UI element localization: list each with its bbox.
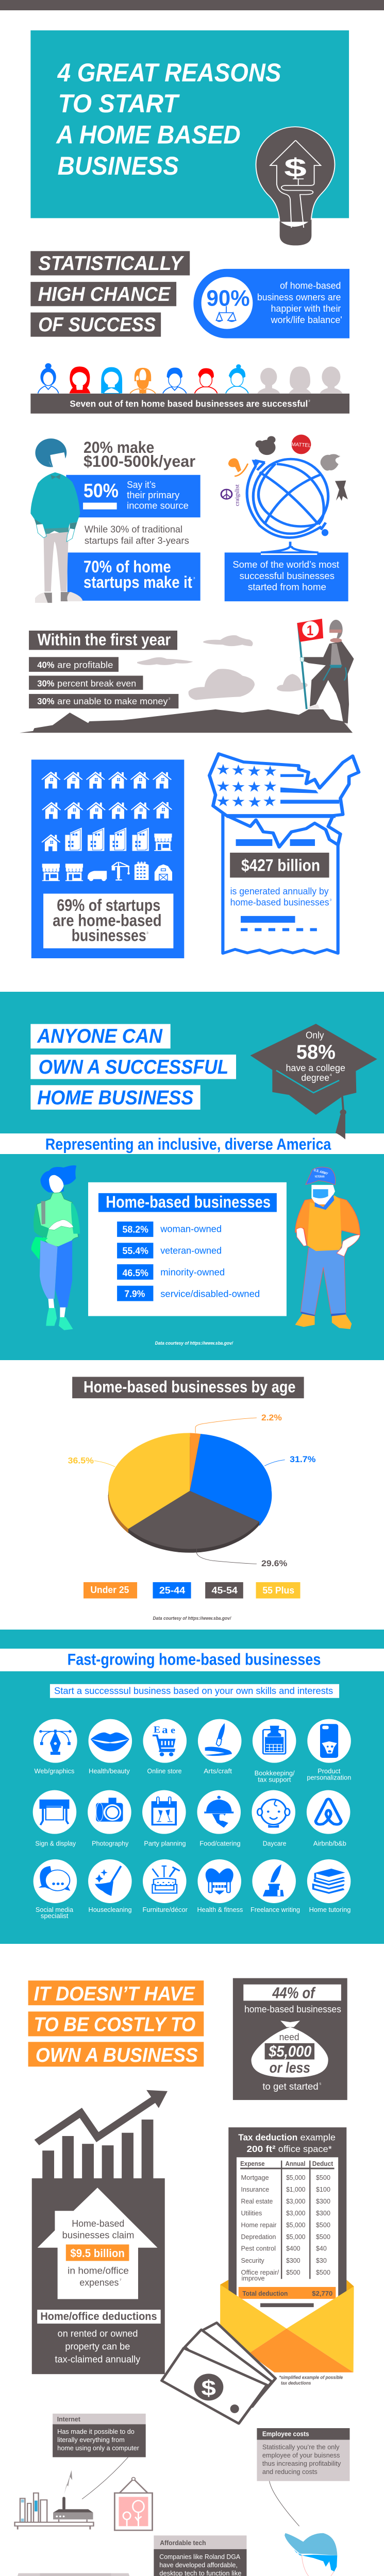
- table: tax deduction example: example: [300, 2132, 336, 2142]
- panel: home office deductions: in home/office: [68, 2266, 129, 2276]
- panel: 44 percent need 5000 or less: 5: [320, 2082, 322, 2086]
- illustration: globe with company logos: MATTEL: [291, 442, 311, 449]
- labels: business types: Home tutoring: [309, 1906, 350, 1913]
- legend: Under 25: [90, 1585, 129, 1596]
- subheading: start a successful business: [50, 1684, 339, 1698]
- panel: 69 percent home based: ★★★: [136, 860, 147, 865]
- panel: income statistics: income source: [127, 501, 189, 511]
- table: tax deduction example: Utilities: [241, 2209, 262, 2217]
- panel: income statistics: 20% make: [84, 439, 154, 456]
- callout: employee costs: employee of your buisness: [262, 2452, 340, 2459]
- section: hero and statistics heading: [30, 30, 349, 338]
- callout: graduation cap 58 percent: have a college: [286, 1063, 345, 1074]
- callout: 90 percent happier: work/life balance': [271, 315, 342, 326]
- panel: home-based businesses stats: 58.2%: [123, 1225, 148, 1235]
- illustration: receipt with american flag map: $427 billion: [241, 856, 320, 875]
- labels: business types: tax support: [258, 1775, 291, 1783]
- panel: home office deductions: Home/office deductions: [40, 2310, 157, 2323]
- callout: graduation cap 58 percent: [251, 1024, 377, 1139]
- illustration: shelf with books and router: [15, 2470, 93, 2530]
- table: tax deduction example: Real estate: [241, 2197, 273, 2205]
- illustration: receipt with american flag map: is generated annually by: [230, 887, 329, 897]
- callout: affordable tech: Companies like Roland DGA: [159, 2553, 240, 2561]
- heading: anyone can own a successful home business: [30, 1024, 236, 1110]
- stat: thirty percent unable to make money: 30%: [37, 696, 55, 706]
- icon: web graphics: [34, 1719, 77, 1763]
- heading: anyone can own a successful home business: HOME BUSINESS: [37, 1087, 194, 1109]
- table: tax deduction example: Depredation: [241, 2233, 276, 2241]
- illustration: woman with bag: [31, 1165, 80, 1330]
- heading: anyone can own a successful home business: ANYONE CAN: [37, 1025, 163, 1047]
- panel: hero teal: [30, 30, 349, 218]
- illustration: receipt with american flag map: ★: [216, 794, 230, 808]
- callout: 90 percent happier: of home-based: [280, 281, 341, 291]
- callout: employee costs: thus increasing profitability: [262, 2460, 341, 2467]
- callout: affordable tech: [139, 2535, 246, 2576]
- illustration: person working on laptop: [189, 2533, 357, 2576]
- labels: business types: Photography: [92, 1839, 128, 1847]
- panel: home-based businesses stats: veteran-owned: [160, 1246, 222, 1256]
- illustration: receipt with american flag map: ★: [232, 794, 245, 809]
- icon: social media bubbles: [34, 1859, 77, 1903]
- pie chart: age distribution: [68, 1413, 315, 1568]
- panel: 69 percent home based: 69% of startups: [57, 896, 160, 915]
- source note: Data courtesy of https://www.sba.gov/: [155, 1341, 233, 1346]
- labels: business types: Online store: [147, 1767, 182, 1775]
- illustration: receipt with american flag map: ★: [248, 794, 261, 809]
- icon row: ten people: [38, 363, 342, 394]
- panel: home-based businesses stats: 46.5%: [123, 1268, 148, 1279]
- panel: home-based businesses stats: service/disabled-owned: [160, 1289, 260, 1299]
- panel: home-based businesses stats: 7.9%: [124, 1289, 145, 1299]
- legend: 25-44: [159, 1586, 185, 1596]
- stat: thirty percent unable to make money: [29, 694, 178, 708]
- panel: within the first year: percent break even: [57, 679, 136, 688]
- labels: business types: Party planning: [144, 1839, 186, 1847]
- illustration: receipt with american flag map: [209, 754, 359, 953]
- panel: businesses started from home: Some of the world’s most: [232, 560, 340, 570]
- heading: statistically high chance of success: [30, 251, 190, 337]
- note: simplified example: *simplified example of possible: [279, 2375, 343, 2380]
- illustration: mountain: [20, 709, 353, 733]
- labels: business types: Web/graphics: [35, 1767, 74, 1775]
- labels: business types: Bookkeeping/: [255, 1769, 295, 1777]
- illustration: receipt with american flag map: home-based businesses: [230, 898, 329, 908]
- illustration: clouds and climber with flag: 1: [307, 623, 313, 639]
- table: tax deduction example: $3,000: [286, 2197, 306, 2205]
- icon: lips: [89, 1719, 132, 1763]
- panel: within the first year: [29, 631, 177, 690]
- icon: bookkeeping calculator: [253, 1719, 296, 1763]
- panel: 44 percent need 5000 or less: [233, 1978, 347, 2100]
- table: tax deduction example: Annual: [286, 2160, 305, 2167]
- stat: thirty percent unable to make money: are unable to make money: [57, 696, 168, 706]
- panel: income statistics: startups make it: [84, 573, 192, 592]
- panel: home office deductions: on rented or owned: [58, 2329, 138, 2339]
- table: tax deduction example: $500: [316, 2233, 330, 2241]
- illustration: receipt with american flag map: 3: [330, 899, 332, 902]
- legend: 55 Plus: [262, 1586, 294, 1596]
- table: tax deduction example: Mortgage: [241, 2174, 269, 2181]
- panel: within the first year: are profitable: [57, 659, 113, 670]
- illustration: envelope: [220, 2284, 354, 2372]
- panel: 69 percent home based: are home-based: [53, 912, 162, 930]
- title: 4 GREAT REASONS: [57, 59, 281, 87]
- section: tax deductions: [32, 2090, 354, 2424]
- labels: business types: Freelance writing: [251, 1906, 300, 1913]
- panel: businesses started from home: [225, 552, 348, 601]
- panel: home office deductions: $9.5 billion: [70, 2247, 125, 2260]
- section: success statistics: [29, 363, 354, 728]
- illustration: stack of dollar bills: [162, 2323, 276, 2424]
- pie chart: age distribution: 31.7%: [290, 1454, 315, 1464]
- callout: 90 percent happier: business owners are: [257, 292, 341, 303]
- icon: home tutoring books: [307, 1859, 350, 1903]
- table: tax deduction example: $500: [316, 2221, 330, 2229]
- note: simplified example: tax deductions: [281, 2380, 311, 2385]
- illustration: receipt with american flag map: ★: [248, 764, 261, 778]
- table: tax deduction example: $3,000: [286, 2209, 306, 2217]
- illustration: globe with company logos: craigslist: [234, 484, 240, 506]
- panel: home office deductions: 7: [120, 2278, 122, 2282]
- callout: graduation cap 58 percent: 4: [330, 1073, 332, 1077]
- icon: sign and display printer: [33, 1790, 76, 1834]
- callout: 90 percent happier: happier with their: [271, 303, 341, 314]
- table: tax deduction example: Office repair/: [241, 2268, 279, 2276]
- illustration: receipt with american flag map: ★: [248, 779, 261, 794]
- icon: arts and craft brush: [198, 1719, 241, 1763]
- heading: statistically high chance of success: HIGH CHANCE: [38, 283, 171, 305]
- panel: 44 percent need 5000 or less: need: [279, 2032, 299, 2043]
- illustration: globe with company logos: [221, 435, 348, 552]
- banner: seven out of ten: [30, 394, 349, 414]
- callout: graduation cap 58 percent: Only: [306, 1030, 324, 1041]
- labels: business types: [35, 1767, 351, 1920]
- table: tax deduction example: Expense: [240, 2160, 265, 2167]
- callout: graduation cap 58 percent: 58%: [296, 1041, 336, 1063]
- panel: 44 percent need 5000 or less: 44% of: [272, 1985, 316, 2002]
- table: tax deduction example: $300: [316, 2197, 330, 2205]
- icon: light bulb with house and dollar: $: [284, 154, 307, 182]
- panel: home office deductions: [32, 2178, 165, 2374]
- panel: 69 percent home based: [31, 759, 184, 958]
- panel: 44 percent need 5000 or less: home-based businesses: [244, 2004, 341, 2015]
- illustration: receipt with american flag map: ★: [232, 779, 245, 794]
- panel: income statistics: $100-500k/year: [84, 453, 195, 471]
- labels: business types: personalization: [307, 1773, 351, 1781]
- table: tax deduction example: $400: [286, 2244, 300, 2252]
- table: tax deduction example: $40: [316, 2244, 327, 2252]
- title: TO START: [58, 90, 180, 118]
- panel: home-based businesses stats: woman-owned: [160, 1225, 222, 1234]
- illustration: army veteran man: VETERAN: [315, 1176, 325, 1178]
- illustration: framed picture: [114, 2478, 153, 2530]
- illustration: clouds and climber with flag: [137, 619, 354, 728]
- labels: business types: Product: [318, 1767, 341, 1775]
- panel: income statistics: Say it’s: [127, 480, 156, 490]
- illustration: stack of dollar bills: $: [202, 2376, 216, 2400]
- source note: Data courtesy of https://www.sba.gov/: [153, 1616, 231, 1621]
- panel: home-based businesses stats: minority-owned: [160, 1267, 225, 1278]
- table: tax deduction example: office space*: [278, 2144, 332, 2154]
- legend: 45-54: [212, 1586, 238, 1596]
- icon: online store cart: a: [162, 1724, 168, 1736]
- icon: airbnb: [307, 1790, 350, 1834]
- panel: income statistics: [66, 439, 201, 601]
- table: tax deduction example: Pest control: [241, 2244, 276, 2252]
- labels: business types: Airbnb/b&b: [313, 1839, 346, 1847]
- stat: thirty percent unable to make money: 2: [169, 697, 171, 701]
- table: tax deduction example: Security: [241, 2257, 264, 2264]
- callout: employee costs: Statistically you’re the only: [262, 2444, 340, 2451]
- section: home office scene: [0, 2414, 357, 2576]
- labels: business types: Food/catering: [199, 1839, 241, 1847]
- illustration: army veteran man: U.S. ARMY: [313, 1168, 328, 1176]
- labels: business types: Social media: [36, 1906, 73, 1913]
- callout: affordable tech: have developed affordable,: [159, 2562, 238, 2569]
- callout: internet: [53, 2414, 146, 2499]
- labels: business types: Housecleaning: [89, 1906, 132, 1913]
- icon: daycare baby: [252, 1790, 295, 1834]
- table: tax deduction example: Insurance: [241, 2185, 269, 2193]
- table: tax deduction example: $1,000: [286, 2185, 306, 2193]
- panel: income statistics: their primary: [127, 490, 180, 501]
- title: BUSINESS: [58, 152, 179, 180]
- heading: it doesn't have to be costly to own a business: [28, 1980, 204, 2066]
- icon: party planning calendar: [142, 1790, 186, 1834]
- icon: online store cart: [143, 1719, 187, 1763]
- panel: income statistics: 70% of home: [84, 558, 171, 577]
- callout: internet: literally everything from: [57, 2436, 125, 2444]
- table: tax deduction example: $100: [316, 2185, 330, 2193]
- icon: housecleaning broom: [88, 1859, 132, 1903]
- icon: phone case with dog: [307, 1719, 351, 1763]
- illustration: army veteran man: [295, 1167, 360, 1329]
- illustration: receipt with american flag map: ★: [264, 764, 277, 778]
- table: tax deduction example: [220, 2127, 354, 2313]
- panel: 69 percent home based: businesses: [72, 926, 146, 945]
- panel: income statistics: While 30% of traditional: [85, 524, 182, 535]
- heading: statistically high chance of success: STATISTICALLY: [38, 252, 185, 274]
- callout: employee costs: Employee costs: [262, 2430, 309, 2437]
- illustration: receipt with american flag map: ★: [263, 794, 276, 808]
- panel: 44 percent need 5000 or less: $5,000: [268, 2043, 311, 2060]
- labels: business types: Sign & display: [35, 1839, 76, 1847]
- table: tax deduction example: $300: [286, 2257, 300, 2264]
- pie chart: age distribution: 29.6%: [261, 1558, 287, 1568]
- table: tax deduction example: $5,000: [286, 2233, 306, 2241]
- panel: income statistics: startups fail after 3-years: [85, 536, 189, 546]
- panel: 69 percent home based: 3: [146, 931, 148, 935]
- icon: health and fitness: [197, 1859, 241, 1903]
- banner: seven out of ten: 2: [308, 399, 310, 403]
- title: A HOME BASED: [56, 121, 241, 149]
- section: business icons and cost heading: [28, 1719, 351, 2100]
- panel: 44 percent need 5000 or less: to get started: [262, 2082, 319, 2092]
- heading: it doesn't have to be costly to own a business: TO BE COSTLY TO: [34, 2013, 195, 2036]
- banner: seven out of ten: Seven out of ten home based businesses are successful: [70, 399, 308, 409]
- table: tax deduction example: Deduct: [312, 2160, 333, 2167]
- panel: home office deductions: expenses: [79, 2278, 119, 2288]
- icon: online store cart: e: [171, 1725, 175, 1736]
- icon: furniture decor: [143, 1859, 187, 1903]
- panel: within the first year: Within the first year: [38, 631, 171, 649]
- panel: home office deductions: Home-based: [72, 2219, 124, 2229]
- panel: home office deductions: businesses claim: [62, 2231, 134, 2241]
- panel: home-based businesses stats: Home-based businesses: [106, 1193, 271, 1212]
- heading: home-based businesses by age: [72, 1377, 304, 1398]
- callout: graduation cap 58 percent: degree: [301, 1073, 329, 1083]
- panel: businesses started from home: successful businesses: [240, 571, 335, 581]
- heading: it doesn't have to be costly to own a business: IT DOESN’T HAVE: [34, 1982, 195, 2005]
- heading: it doesn't have to be costly to own a business: OWN A BUSINESS: [36, 2044, 198, 2066]
- icon: light bulb with house and dollar: [256, 127, 335, 245]
- pie chart: age distribution: 36.5%: [68, 1455, 94, 1465]
- note: simplified example: [279, 2375, 343, 2385]
- panel: home office deductions: tax-claimed annually: [55, 2354, 141, 2365]
- table: tax deduction example: $500: [316, 2174, 330, 2181]
- table: tax deduction example: improve: [241, 2274, 265, 2282]
- table: tax deduction example: $30: [316, 2257, 327, 2264]
- table: tax deduction example: Total deduction: [242, 2290, 288, 2297]
- heading: statistically high chance of success: OF SUCCESS: [38, 313, 156, 336]
- labels: business types: Daycare: [263, 1839, 287, 1847]
- table: tax deduction example: Tax deduction: [238, 2132, 297, 2142]
- callout: employee costs: and reducing costs: [262, 2468, 318, 2476]
- legend: [84, 1582, 300, 1599]
- table: tax deduction example: $5,000: [286, 2174, 306, 2181]
- callout: employee costs: [257, 2428, 349, 2526]
- panel: income statistics: 50%: [84, 479, 119, 502]
- section: anyone can own a business: [30, 1024, 377, 1346]
- subheading: start a successful business: Start a successsul business based on your own skills and interests: [54, 1686, 333, 1697]
- panel: within the first year: 40%: [37, 659, 55, 670]
- panel: home office deductions: property can be: [65, 2342, 130, 2352]
- pie chart: age distribution: 2.2%: [261, 1413, 282, 1422]
- title: [56, 59, 281, 180]
- icon: online store cart: E: [154, 1725, 160, 1735]
- panel: income statistics: 3: [193, 577, 195, 580]
- section: businesses by age and fast growing: [50, 1377, 339, 1698]
- labels: business types: Arts/craft: [204, 1767, 232, 1775]
- table: tax deduction example: $500: [286, 2268, 300, 2276]
- callout: affordable tech: Affordable tech: [160, 2539, 206, 2547]
- panel: 44 percent need 5000 or less: or less: [270, 2060, 310, 2076]
- section: startups and revenue: [20, 694, 359, 958]
- callout: internet: home using only a computer: [57, 2445, 139, 2452]
- table: tax deduction example: $300: [316, 2209, 330, 2217]
- panel: home-based businesses stats: 55.4%: [123, 1246, 148, 1257]
- illustration: receipt with american flag map: ★: [216, 779, 230, 793]
- icon: camera: [88, 1790, 131, 1834]
- heading: home-based businesses by age: Home-based businesses by age: [84, 1378, 295, 1396]
- table: tax deduction example: $2,770: [312, 2290, 332, 2297]
- callout: internet: Internet: [57, 2416, 80, 2423]
- labels: business types: Health/beauty: [89, 1767, 130, 1775]
- table: tax deduction example: 200 ft²: [246, 2144, 276, 2154]
- callout: 90 percent happier: [193, 269, 349, 338]
- illustration: receipt with american flag map: ★: [216, 762, 230, 776]
- panel: within the first year: 30%: [37, 679, 55, 688]
- labels: business types: Furniture/décor: [143, 1906, 188, 1913]
- callout: internet: Has made it possible to do: [57, 2428, 135, 2435]
- table: tax deduction example: Home repair: [241, 2221, 277, 2229]
- illustration: desk with printer and outlet: [0, 2573, 152, 2576]
- table: tax deduction example: $5,000: [286, 2221, 306, 2229]
- bar chart: rising bars with arrow: [37, 2090, 168, 2179]
- labels: business types: Health & fitness: [197, 1906, 243, 1913]
- panel: home-based businesses stats: [88, 1182, 287, 1316]
- illustration: receipt with american flag map: ★: [264, 779, 277, 793]
- illustration: receipt with american flag map: ★: [232, 763, 245, 777]
- heading: anyone can own a successful home business: OWN A SUCCESSFUL: [39, 1056, 228, 1078]
- illustration: man in teal sweater: [30, 438, 83, 603]
- table: tax deduction example: $500: [316, 2268, 330, 2276]
- panel: businesses started from home: started from home: [248, 583, 326, 592]
- callout: 90 percent happier: 90%: [207, 285, 250, 311]
- icon grid: eighteen home business types: [33, 1719, 351, 1903]
- icon: food catering cloche: [197, 1790, 241, 1834]
- icon: freelance writing quill: [252, 1859, 296, 1903]
- labels: business types: specialist: [41, 1912, 69, 1920]
